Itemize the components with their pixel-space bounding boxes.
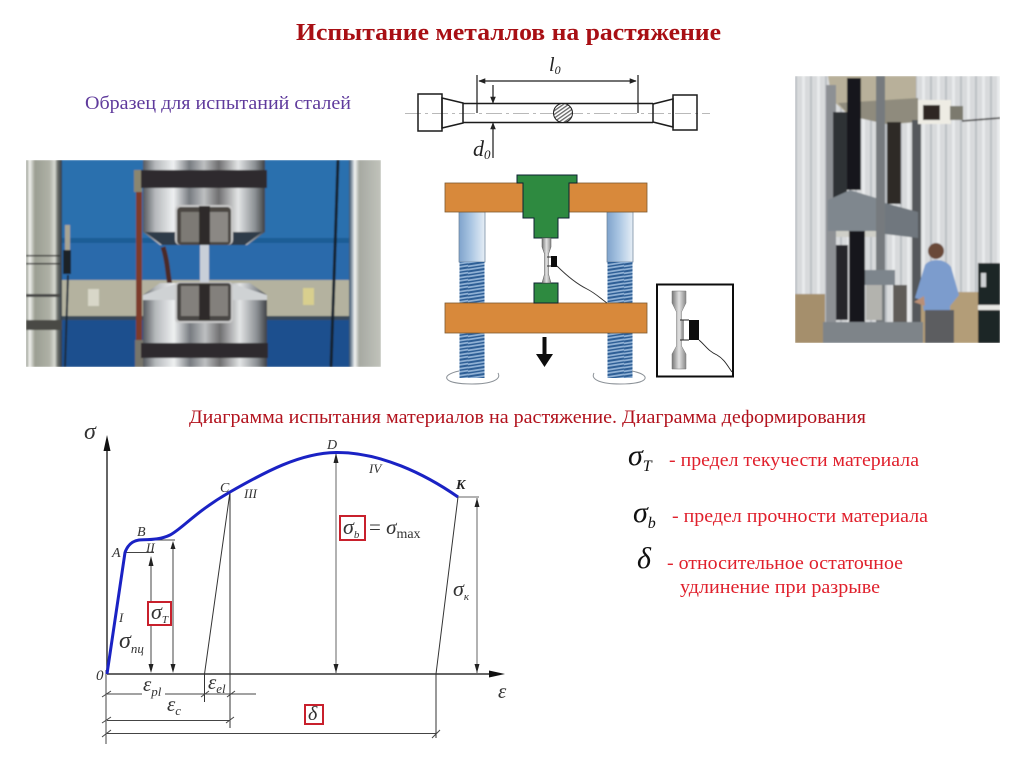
delta box xyxy=(305,703,323,725)
strain labels: pl xyxy=(150,684,162,699)
point labels: III xyxy=(243,486,258,501)
legend xyxy=(628,439,928,598)
subtitle: specimen for steel tests: Образец для испытаний сталей xyxy=(85,93,351,114)
sigma b box: = σ xyxy=(369,515,396,539)
legend: yield strength: T xyxy=(643,458,653,475)
title: Испытание металлов на растяжение xyxy=(296,20,721,46)
dimension l0: 0 xyxy=(555,63,561,77)
blue stress-strain curve xyxy=(107,452,458,674)
legend: ultimate strength xyxy=(633,496,928,532)
screw columns xyxy=(459,212,633,378)
sigma T box: σ xyxy=(151,599,162,624)
point labels: K xyxy=(455,478,467,493)
sigma K: к xyxy=(464,591,470,603)
extensometer and wire xyxy=(551,256,557,267)
dimension d0: d xyxy=(473,136,484,161)
sigma b box: b xyxy=(354,529,360,541)
point labels: A xyxy=(111,546,121,561)
legend: yield strength xyxy=(628,439,919,475)
point labels xyxy=(96,438,467,684)
dimension d0: 0 xyxy=(484,147,491,162)
point labels: IV xyxy=(368,461,383,476)
point labels: 0 xyxy=(96,668,104,684)
dimension lines xyxy=(102,453,480,744)
delta box: δ xyxy=(308,703,318,725)
point labels: I xyxy=(118,610,124,625)
axis labels: σ xyxy=(84,419,97,445)
point labels: D xyxy=(326,438,337,453)
point labels: II xyxy=(145,540,155,555)
stress-strain chart: ε xyxy=(498,679,507,703)
photo: tensile test grips xyxy=(26,160,381,367)
legend: relative elongation xyxy=(637,542,903,598)
legend: yield strength: - предел текучести материала xyxy=(669,451,919,471)
rotation arrows xyxy=(447,371,645,384)
stress-strain chart: el xyxy=(216,681,226,696)
plates xyxy=(445,183,647,212)
point labels: C xyxy=(220,481,230,496)
sigma K: σ xyxy=(453,576,464,601)
inset: specimen detail xyxy=(657,284,733,376)
photo: large testing machine xyxy=(795,76,1000,343)
stress-strain chart: ε xyxy=(167,692,175,716)
crosshead grips xyxy=(517,175,577,238)
legend: ultimate strength: σ xyxy=(633,496,648,529)
legend: ultimate strength: b xyxy=(648,515,656,532)
sigma b box: σ xyxy=(343,514,354,539)
dimension l0: l xyxy=(549,54,555,76)
sigma b box xyxy=(340,514,421,542)
stress-strain chart xyxy=(84,419,507,744)
dimension d0 xyxy=(473,85,493,162)
person xyxy=(914,243,959,343)
legend: ultimate strength: - предел прочности материала xyxy=(672,507,928,527)
point labels: B xyxy=(137,525,146,540)
legend: relative elongation: - относительное остаточное xyxy=(667,554,903,574)
sigma T box xyxy=(148,599,171,626)
stress-strain chart: ε xyxy=(208,670,216,694)
specimen xyxy=(542,238,551,283)
sigma b box: max xyxy=(396,527,421,542)
specimen drawing xyxy=(405,54,710,162)
legend: yield strength: σ xyxy=(628,439,643,472)
dimension l0 xyxy=(477,54,638,113)
sigma proportional limit: σ xyxy=(119,628,131,654)
strain labels: ε xyxy=(143,672,151,696)
load arrow xyxy=(536,337,553,367)
legend: relative elongation: удлинение при разрыве xyxy=(680,578,880,598)
sigma T box: T xyxy=(162,614,169,626)
stress-strain chart: c xyxy=(175,703,181,718)
axes xyxy=(104,435,505,678)
sigma proportional limit: пц xyxy=(131,641,144,656)
legend: relative elongation: δ xyxy=(637,542,652,575)
heading: chart title: Диаграмма испытания материалов на растяжение. Диаграмма деформирования xyxy=(189,408,867,428)
diagram: tensile test machine xyxy=(445,175,733,384)
